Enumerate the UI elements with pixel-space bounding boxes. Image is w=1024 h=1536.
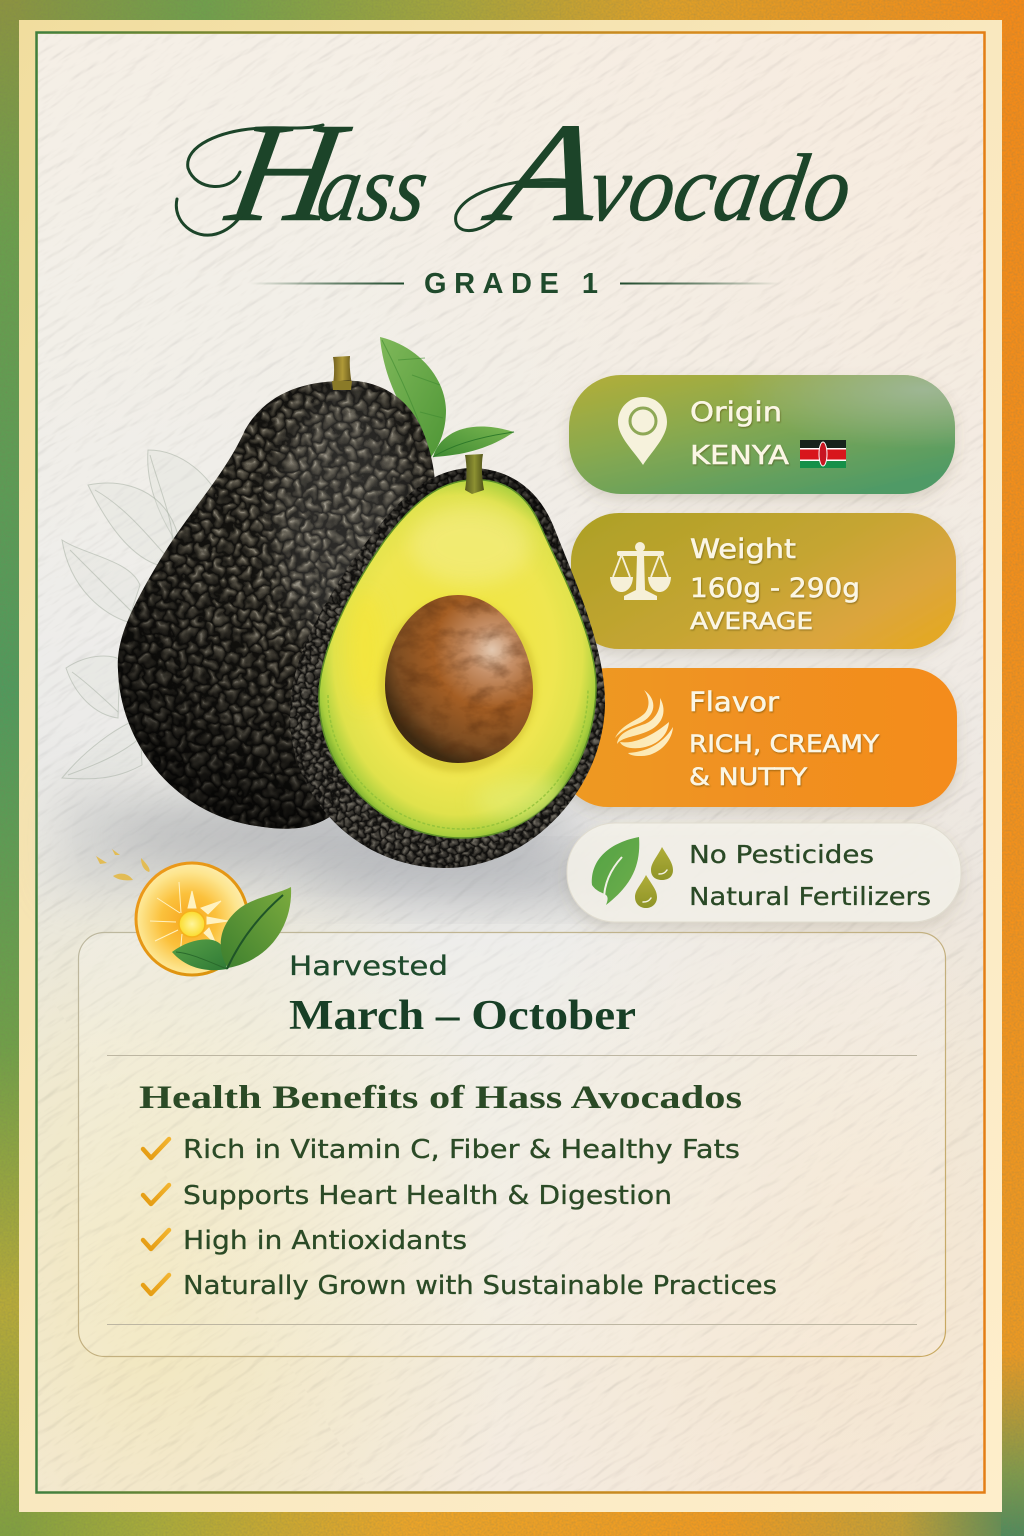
weight text <box>690 534 860 635</box>
whole dark avocado <box>110 356 445 837</box>
origin text: KENYA <box>690 441 789 471</box>
stem <box>332 356 353 390</box>
icon: kenya flag <box>800 440 846 468</box>
origin text <box>690 397 789 471</box>
pill: weight <box>571 513 956 649</box>
pill: no pesticides <box>567 823 961 922</box>
benefit 1: Rich in Vitamin C, Fiber & Healthy Fats <box>183 1135 740 1165</box>
title <box>176 93 867 251</box>
flavor text: Flavor <box>689 687 780 718</box>
info panel <box>78 932 946 1356</box>
leaves behind avocado <box>380 337 514 457</box>
flavor text <box>689 687 879 791</box>
pill: origin <box>569 375 955 494</box>
health benefits heading: Health Benefits of Hass Avocados <box>139 1080 742 1116</box>
title: A <box>475 93 615 251</box>
benefit 4: Naturally Grown with Sustainable Practices <box>183 1271 777 1301</box>
icon: sun and leaves badge <box>96 849 291 975</box>
title: ass <box>310 135 457 241</box>
no pesticides text <box>689 840 931 911</box>
icon: flavor swirl <box>615 690 673 756</box>
seed <box>379 590 540 772</box>
ghost background leaves <box>62 450 218 779</box>
benefit 2: Supports Heart Health & Digestion <box>183 1181 672 1211</box>
origin text: Origin <box>690 397 782 428</box>
icon: scales <box>610 542 671 600</box>
harvest months: March – October <box>289 993 636 1039</box>
flavor text: RICH, CREAMY <box>689 730 879 758</box>
table shadow <box>60 790 640 900</box>
no pesticides text: No Pesticides <box>689 840 874 869</box>
pill: flavor <box>560 668 957 807</box>
stem <box>465 454 484 494</box>
weight text: 160g - 290g <box>690 573 860 604</box>
title: H <box>217 93 359 251</box>
weight text: Weight <box>690 534 796 565</box>
no pesticides text: Natural Fertilizers <box>689 882 931 911</box>
flesh <box>319 480 596 838</box>
weight text: AVERAGE <box>690 609 813 635</box>
harvested label: Harvested <box>289 951 448 982</box>
flavor text: & NUTTY <box>689 763 807 791</box>
icon: leaf and drops <box>592 837 673 908</box>
benefit 3: High in Antioxidants <box>183 1226 467 1256</box>
halved avocado <box>284 454 612 874</box>
icon: map pin <box>618 397 667 465</box>
outer skin <box>284 462 612 874</box>
title: vocado <box>581 135 860 241</box>
subtitle: grade 1: GRADE 1 <box>424 268 598 300</box>
